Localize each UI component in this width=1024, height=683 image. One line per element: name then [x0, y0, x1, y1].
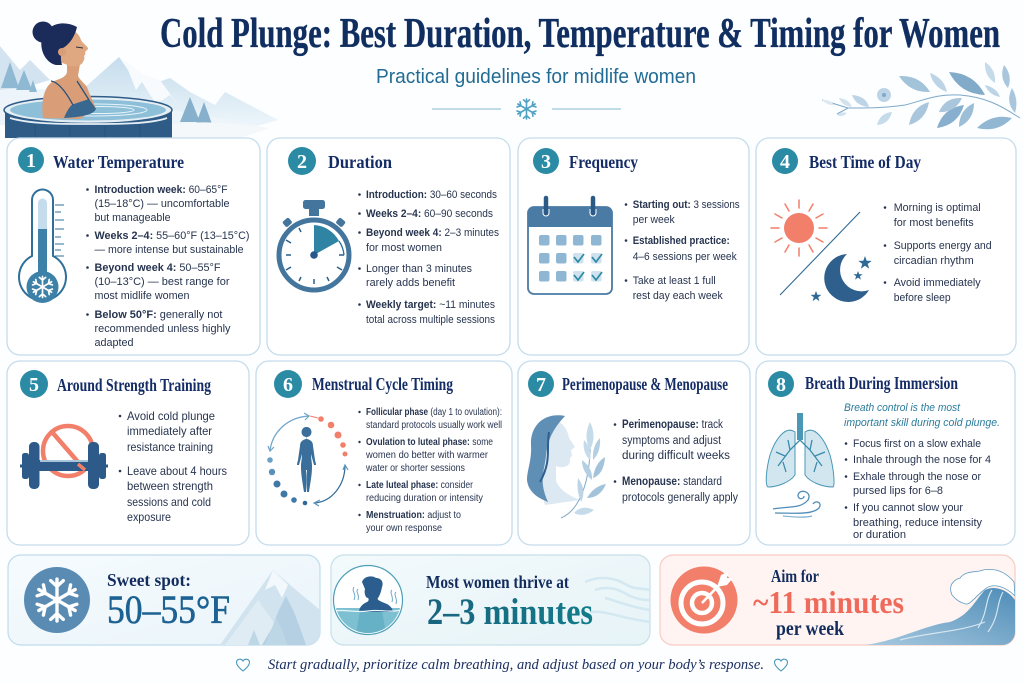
icon: woman profile with leaves	[527, 415, 606, 518]
list: breathing guidelines: breathing, reduce intensity	[853, 517, 982, 529]
list: menopause guidelines: Perimenopause: track	[622, 419, 723, 431]
footer message: Start gradually, prioritize calm breathing, and adjust based on your body’s response.	[268, 657, 764, 673]
number badge 5	[20, 370, 48, 398]
icon: calendar	[528, 198, 612, 294]
list: duration guidelines: rarely adds benefit	[366, 277, 455, 289]
panel: duration	[267, 138, 510, 355]
list: duration guidelines: total across multiple sessions	[366, 314, 495, 326]
list: cycle phase guidelines: Ovulation to luteal phase: some	[366, 437, 493, 448]
callout: breath control note: Breath control is the most	[844, 402, 961, 414]
list: strength training guidelines	[119, 409, 227, 524]
list: strength training guidelines: resistance training	[127, 440, 213, 454]
panel: water temperature	[7, 138, 260, 355]
heading: Water Temperature	[53, 152, 184, 172]
icon: thermometer	[19, 190, 66, 303]
callout: breath control note: important skill during cold plunge.	[844, 417, 1000, 429]
heading: Perimenopause & Menopause	[562, 374, 728, 394]
list: timing guidelines	[884, 202, 992, 304]
panel: menstrual cycle timing	[256, 361, 512, 545]
list: temperature guidelines: but manageable	[94, 212, 170, 224]
list: menopause guidelines	[614, 419, 738, 504]
panel: frequency	[518, 138, 749, 355]
list: cycle phase guidelines: standard protocols usually work well	[366, 420, 502, 431]
list: strength training guidelines: between strength	[127, 479, 213, 493]
icon: target	[670, 566, 738, 634]
number badge 8	[768, 371, 794, 397]
label: Most women thrive at	[426, 572, 569, 592]
woman	[32, 22, 96, 119]
list: menopause guidelines: protocols generally apply	[622, 492, 738, 504]
number badge 3	[533, 148, 559, 174]
list: menopause guidelines: Menopause: standard	[622, 476, 722, 488]
list: strength training guidelines: immediately after	[127, 424, 212, 438]
heading: Breath During Immersion	[805, 373, 958, 393]
heading: Best Time of Day	[809, 152, 921, 172]
panel: breath during immersion	[756, 361, 1015, 545]
callout: most women thrive	[331, 555, 650, 645]
tub rim and water	[4, 96, 172, 124]
label: Sweet spot:	[107, 570, 191, 590]
list: duration guidelines: Longer than 3 minutes	[366, 263, 472, 275]
list: timing guidelines: Avoid immediately	[894, 277, 981, 289]
list: frequency guidelines	[625, 199, 740, 302]
number badge 7: 7	[536, 374, 546, 396]
list: duration guidelines: Introduction: 30–60 seconds	[366, 189, 497, 201]
icon: cycle with body silhouette	[267, 413, 348, 506]
list: duration guidelines: Weekly target: ~11 minutes	[366, 299, 495, 311]
number badge 8: 8	[776, 374, 786, 396]
list: duration guidelines	[358, 189, 499, 326]
icon: sun and moon	[771, 200, 872, 302]
callout: breath control note	[844, 402, 1000, 429]
subtitle: Practical guidelines for midlife women	[376, 66, 696, 88]
panel: best time of day	[756, 138, 1016, 355]
list: cycle phase guidelines: water or shorter sessions	[365, 463, 465, 474]
list: temperature guidelines: — more intense but sustainable	[94, 244, 244, 256]
list: temperature guidelines	[86, 184, 250, 349]
list: cycle phase guidelines	[358, 407, 502, 534]
tub body	[5, 110, 172, 138]
tub front	[5, 112, 172, 138]
heading: Duration	[328, 152, 392, 172]
list: breathing guidelines: or duration	[853, 529, 906, 541]
number badge 5: 5	[29, 374, 39, 396]
list: temperature guidelines: Beyond week 4: 50–55°F	[94, 262, 221, 274]
list: breathing guidelines: pursed lips for 6–8	[853, 485, 943, 497]
list: cycle phase guidelines: your own response	[366, 523, 442, 534]
number badge 2	[288, 147, 316, 175]
label: per week	[776, 618, 845, 640]
list: timing guidelines: Supports energy and	[894, 240, 992, 252]
callout: aim for 11 minutes	[660, 555, 1015, 645]
list: frequency guidelines: Established practice:	[633, 235, 730, 247]
number badge 6	[274, 370, 302, 398]
callout: sweet spot	[8, 555, 320, 645]
stat: 2-3 minutes: 2–3 minutes	[427, 592, 593, 633]
heading: Menstrual Cycle Timing	[312, 374, 453, 394]
list: temperature guidelines: Weeks 2–4: 55–60°F (13–15°C)	[94, 230, 250, 242]
list: timing guidelines: circadian rhythm	[894, 255, 974, 267]
stat: 11 minutes: ~11 minutes	[753, 584, 904, 620]
list: cycle phase guidelines: Follicular phase (day 1 to ovulation):	[366, 407, 502, 418]
list: cycle phase guidelines: reducing duration or intensity	[366, 493, 483, 504]
list: timing guidelines: Morning is optimal	[894, 202, 981, 214]
number badge 4	[772, 148, 798, 174]
list: temperature guidelines: adapted	[94, 337, 134, 349]
icon: dumbbell with no sign	[20, 426, 108, 489]
list: temperature guidelines: recommended unless highly	[94, 323, 231, 335]
illustration: mountain	[220, 570, 320, 645]
list: timing guidelines: for most benefits	[894, 217, 974, 229]
icon: stopwatch	[279, 200, 349, 290]
illustration: wave	[865, 569, 1015, 645]
list: frequency guidelines: Starting out: 3 sessions	[633, 199, 740, 211]
decoration: waves	[585, 578, 650, 622]
number badge 1	[18, 147, 44, 173]
illustration: leafy branch	[822, 62, 1020, 129]
list: duration guidelines: Weeks 2–4: 60–90 seconds	[366, 208, 493, 220]
icon: woman in water	[334, 566, 402, 635]
list: breathing guidelines: Inhale through the nose for 4	[853, 454, 991, 466]
icon: heart left	[236, 659, 250, 671]
list: breathing guidelines: Focus first on a slow exhale	[853, 438, 981, 450]
number badge 2: 2	[297, 151, 307, 173]
list: strength training guidelines: exposure	[127, 510, 171, 524]
list: breathing guidelines	[845, 438, 991, 541]
list: menopause guidelines: symptoms and adjust	[622, 435, 722, 447]
list: cycle phase guidelines: Late luteal phase: consider	[366, 480, 474, 491]
list: strength training guidelines: sessions and cold	[127, 495, 211, 509]
number badge 3: 3	[541, 151, 551, 173]
list: breathing guidelines: If you cannot slow your	[853, 502, 963, 514]
list: strength training guidelines: Avoid cold plunge	[127, 409, 215, 423]
list: cycle phase guidelines: Menstruation: adjust to	[366, 510, 461, 521]
list: breathing guidelines: Exhale through the nose or	[853, 471, 981, 483]
illustration: woman in cold plunge tub with mountains	[0, 22, 278, 138]
list: temperature guidelines: (15–18°C) — uncomfortable	[94, 198, 230, 210]
icon: snowflake divider	[516, 99, 537, 119]
list: frequency guidelines: rest day each week	[633, 290, 723, 302]
stat: 50-55F: 50–55°F	[107, 587, 230, 632]
heading: Around Strength Training	[57, 375, 211, 395]
list: strength training guidelines: Leave about 4 hours	[127, 464, 227, 478]
icon: heart right	[774, 659, 788, 671]
number badge 4: 4	[780, 151, 790, 173]
panel: around strength training	[7, 361, 249, 545]
list: duration guidelines: Beyond week 4: 2–3 minutes	[366, 227, 499, 239]
list: cycle phase guidelines: women do better with warmer	[365, 450, 489, 461]
label: Aim for	[771, 566, 819, 586]
list: temperature guidelines: (10–13°C) — best range for	[94, 276, 230, 288]
list: temperature guidelines: Below 50°F: generally not	[94, 309, 222, 321]
list: duration guidelines: for most women	[366, 242, 442, 254]
icon: snowflake	[24, 567, 90, 633]
number badge 7	[528, 371, 554, 397]
list: frequency guidelines: per week	[633, 214, 675, 226]
number badge 6: 6	[283, 374, 293, 396]
list: temperature guidelines: Introduction week: 60–65°F	[94, 184, 228, 196]
list: temperature guidelines: most midlife women	[94, 290, 190, 302]
heading: Frequency	[569, 152, 638, 172]
list: timing guidelines: before sleep	[894, 292, 951, 304]
list: frequency guidelines: 4–6 sessions per week	[633, 251, 737, 263]
number badge 1: 1	[26, 150, 36, 172]
panel: perimenopause and menopause	[518, 361, 750, 545]
icon: lungs and breath swirl	[766, 413, 834, 517]
list: menopause guidelines: during difficult weeks	[622, 450, 730, 462]
list: frequency guidelines: Take at least 1 full	[633, 275, 716, 287]
